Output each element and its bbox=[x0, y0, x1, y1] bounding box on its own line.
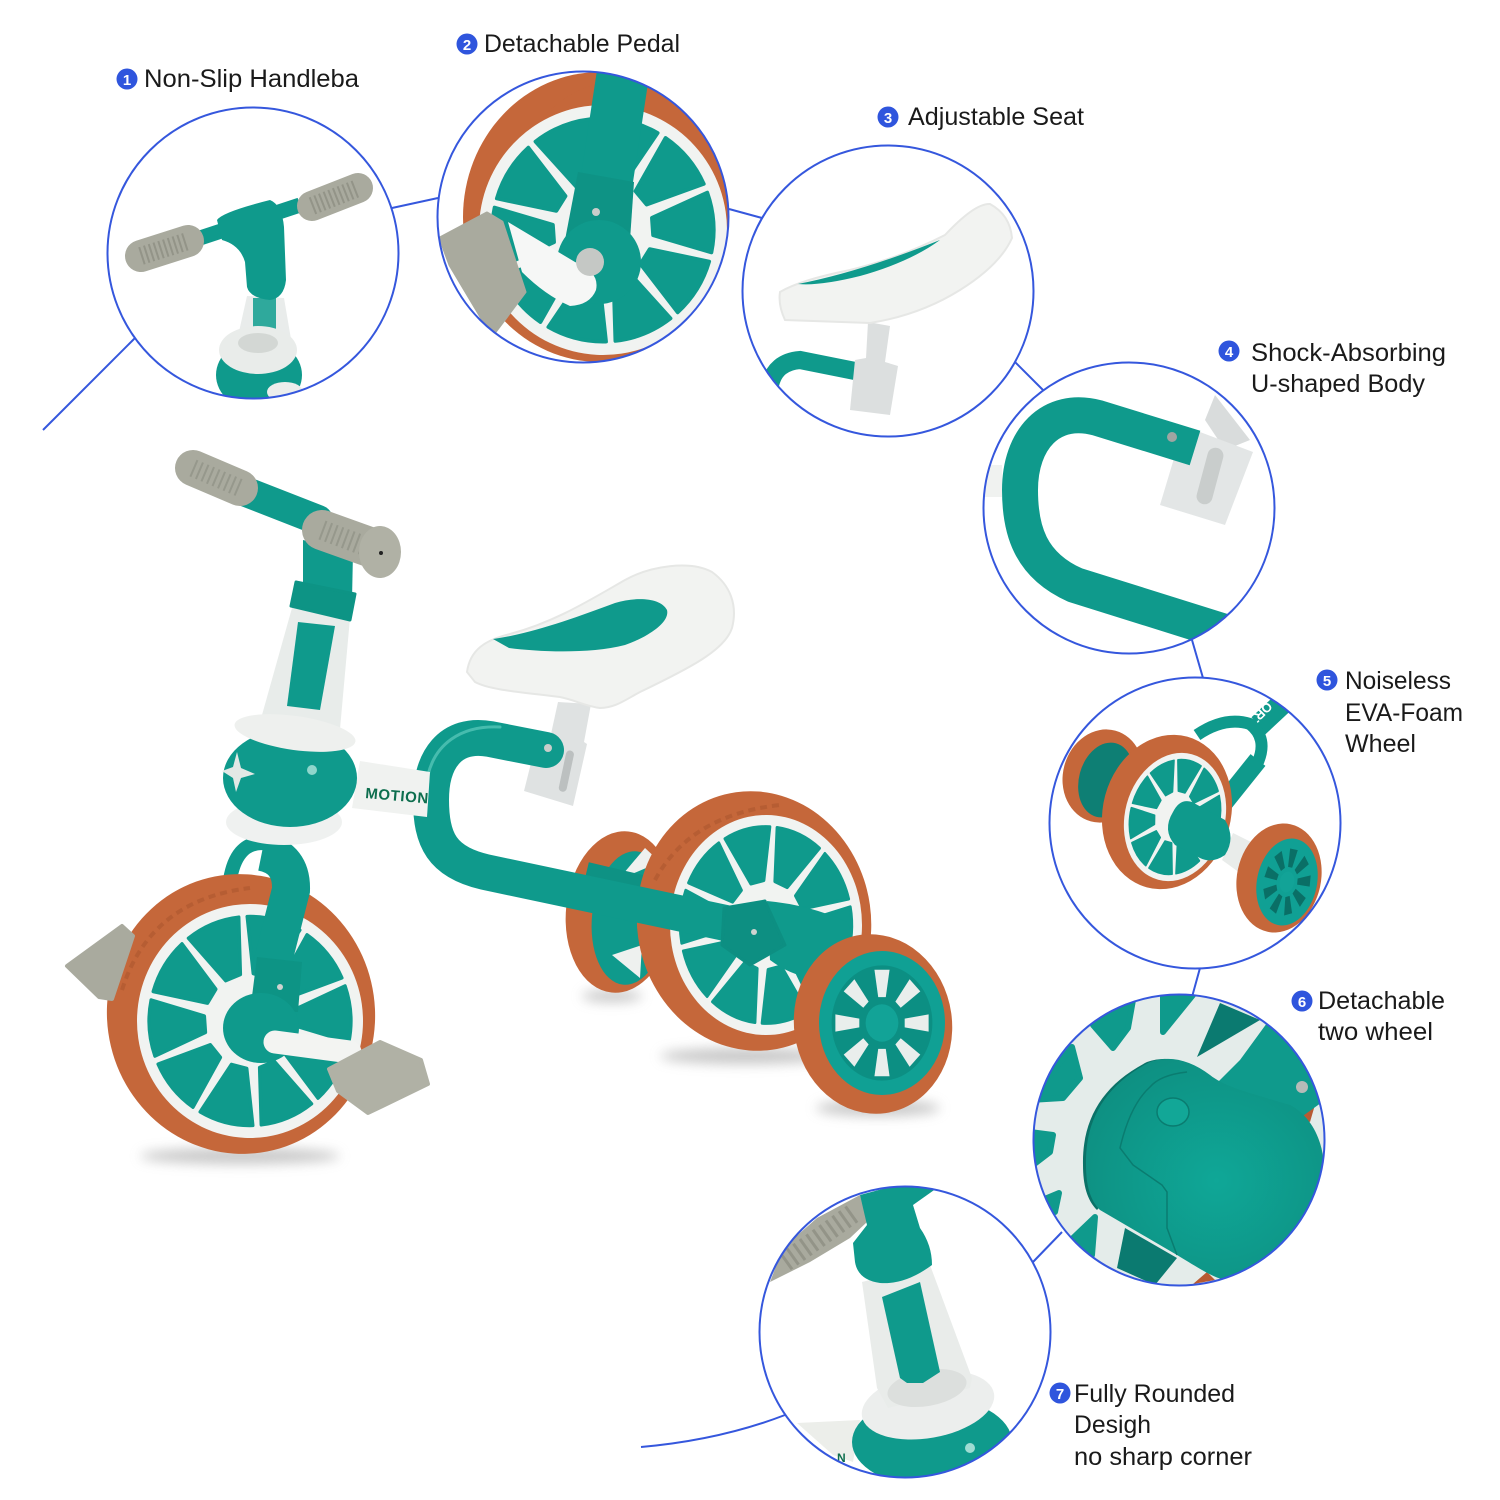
handlebar column bbox=[262, 540, 355, 729]
label 4: U-shaped Body bbox=[1251, 370, 1426, 398]
label 3: 3 bbox=[884, 110, 892, 127]
seat post bracket bbox=[524, 702, 591, 806]
white underside of head bbox=[226, 799, 342, 845]
frame letter: N bbox=[837, 1451, 846, 1465]
panel 6: detachable wheel detail bbox=[1030, 994, 1325, 1286]
label 1: Non-Slip Handleba bbox=[144, 65, 359, 93]
panel 1: handlebar detail bbox=[108, 108, 398, 411]
U-shaped frame bbox=[428, 727, 735, 925]
ground shadows bbox=[140, 990, 940, 1164]
right pedal bbox=[329, 1042, 428, 1113]
left pedal bbox=[67, 926, 133, 999]
rear crossbar bbox=[587, 870, 680, 892]
label 6: two wheel bbox=[1318, 1018, 1433, 1046]
motion crossbar bbox=[352, 761, 430, 817]
panel 4: U-shaped body detail bbox=[983, 362, 1274, 654]
connector lines bbox=[43, 198, 1203, 1447]
label 7: 7 bbox=[1056, 1386, 1064, 1403]
label 4: Shock-Absorbing bbox=[1251, 339, 1446, 367]
label 7: Fully Rounded bbox=[1074, 1380, 1235, 1408]
label 7: no sharp corner bbox=[1074, 1443, 1252, 1471]
label 5: 5 bbox=[1323, 673, 1331, 690]
front fork leg and hub bbox=[223, 852, 302, 1063]
panel 3: seat detail bbox=[742, 146, 1034, 436]
label 4 bbox=[1218, 339, 1446, 398]
label 7: Desigh bbox=[1074, 1411, 1151, 1439]
panel 7: rounded design detail bbox=[760, 1186, 1050, 1487]
small training wheel bbox=[782, 924, 964, 1124]
label 5: Noiseless bbox=[1345, 667, 1451, 695]
far rear wheel bbox=[558, 826, 682, 998]
front fork rear arc bbox=[230, 843, 302, 885]
motion crossbar: MOTION bbox=[365, 785, 429, 808]
label 2: Detachable Pedal bbox=[484, 30, 680, 58]
label 6 bbox=[1292, 987, 1445, 1046]
panel 5: EVA-foam wheel detail bbox=[1050, 678, 1340, 968]
pedal crank bbox=[275, 1042, 350, 1052]
handlebar bbox=[193, 468, 401, 578]
seat bbox=[467, 566, 734, 708]
panel 2: pedal detail bbox=[436, 70, 730, 364]
label 5: EVA-Foam bbox=[1345, 699, 1463, 727]
big rear wheel bbox=[620, 776, 892, 1069]
label 5: Wheel bbox=[1345, 730, 1416, 758]
label 4: 4 bbox=[1225, 344, 1234, 361]
label 1: 1 bbox=[123, 72, 131, 89]
frame lettering: ORT bbox=[1245, 699, 1275, 729]
rear axle housing bbox=[722, 901, 851, 978]
label 6: Detachable bbox=[1318, 987, 1445, 1015]
label 3: Adjustable Seat bbox=[908, 103, 1084, 131]
label 5 bbox=[1316, 667, 1463, 758]
label 6: 6 bbox=[1298, 994, 1306, 1011]
main product: balance bike bbox=[67, 468, 964, 1171]
front wheel bbox=[89, 857, 393, 1171]
label 7 bbox=[1050, 1380, 1252, 1471]
label 2: 2 bbox=[463, 37, 471, 54]
teal head ball with star bbox=[222, 708, 358, 827]
